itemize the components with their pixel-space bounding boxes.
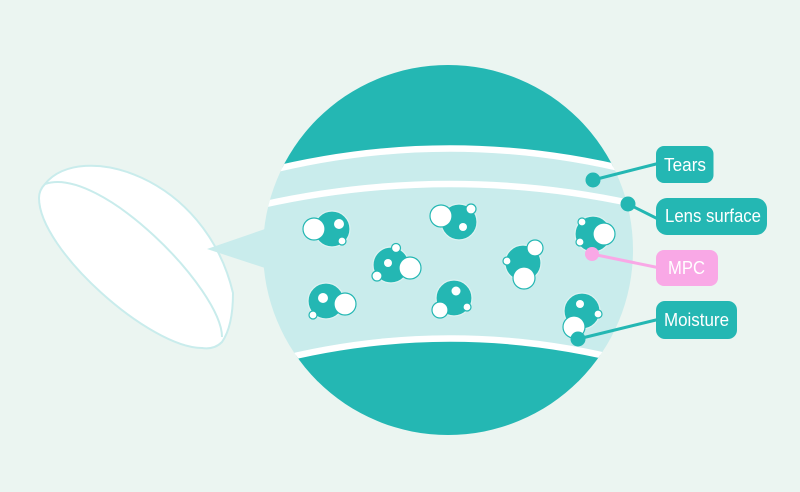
contact lens xyxy=(39,166,233,348)
lens surface boundary xyxy=(250,184,650,208)
MPC molecule 1 xyxy=(303,211,350,247)
lens band xyxy=(255,60,645,440)
bottom teal cap xyxy=(296,342,600,435)
MPC molecule 8 xyxy=(563,293,602,338)
magnified circle xyxy=(207,60,650,440)
callout: Moisture: Moisture xyxy=(664,310,729,330)
top teal cap xyxy=(282,65,613,168)
MPC molecule 4 xyxy=(308,283,356,319)
MPC molecule 6 xyxy=(503,240,543,289)
callout: Lens surface: Lens surface xyxy=(665,206,761,226)
callout: MPC xyxy=(585,247,718,286)
callout: MPC: MPC xyxy=(668,258,705,278)
pointer to lens xyxy=(207,229,265,268)
tear film boundary xyxy=(260,148,640,173)
MPC molecule 3 xyxy=(372,244,421,283)
MPC molecule 7 xyxy=(575,216,615,252)
callout: Tears xyxy=(586,146,714,188)
MPC molecule 5 xyxy=(432,280,472,318)
callout: Moisture xyxy=(570,301,737,346)
bottom boundary xyxy=(294,335,602,358)
callout: Lens surface xyxy=(620,196,767,235)
MPC molecule 2 xyxy=(430,204,477,240)
callout: Tears: Tears xyxy=(664,155,706,175)
